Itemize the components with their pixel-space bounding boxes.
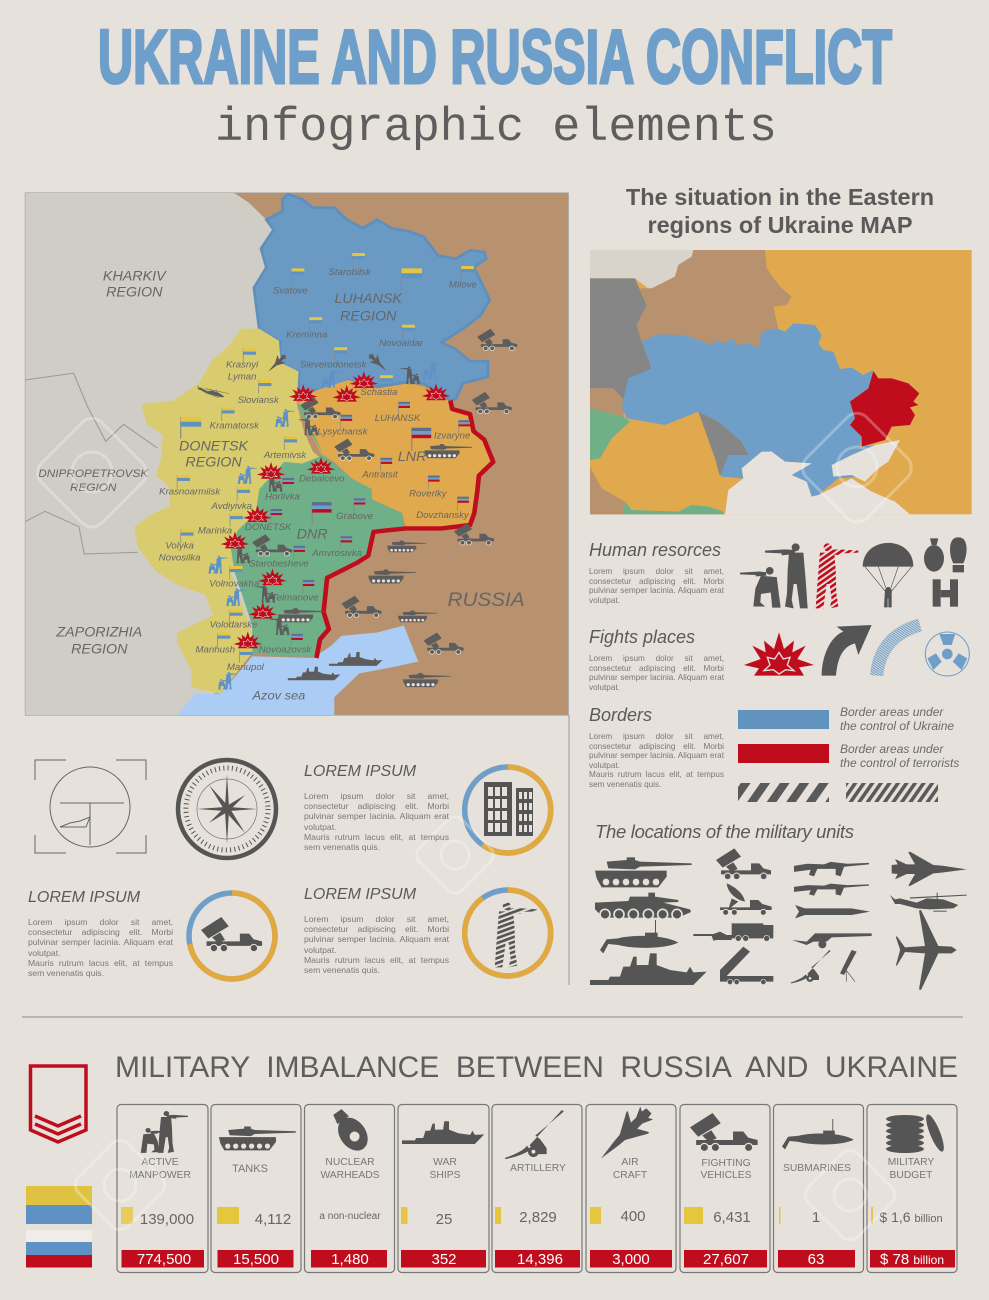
text: borders [589, 732, 724, 789]
card labels: MANPOWER [129, 1170, 191, 1181]
card labels [129, 1157, 934, 1181]
card labels: SHIPS [430, 1170, 461, 1181]
Russia values: 3,000 [612, 1251, 650, 1268]
text: fights places: pulvinar semper lacinia. Aliquam erat [589, 673, 724, 682]
text: lorem block top: sem venenatis quis. [304, 842, 380, 852]
card labels: AIR [621, 1157, 639, 1168]
Russia values [122, 1250, 955, 1268]
section headings right column: Borders [589, 705, 652, 725]
map labels: Roverlky [409, 488, 448, 498]
main map [25, 193, 568, 715]
ring chart: soldier [465, 890, 551, 976]
LNR area [297, 380, 491, 530]
map labels: REGION [340, 308, 397, 323]
map labels: Marinka [198, 525, 232, 535]
Russia values: 27,607 [703, 1251, 749, 1268]
text: borders: Mauris rutrum lacus elit, at tempus [589, 770, 724, 779]
occupied east in red [850, 371, 919, 447]
text: lorem block top: consectetur adipiscing elit. Morbi [304, 801, 449, 811]
subtitle: infographic elements [215, 102, 777, 155]
map labels: REGION [70, 482, 117, 494]
Ukraine value bars [121, 1207, 873, 1224]
text: lorem block left: Lorem ipsum dolor sit amet, [28, 917, 173, 927]
map labels: Volyka [165, 540, 194, 550]
scope diagram [35, 760, 146, 853]
Ukraine shape [622, 323, 875, 497]
Ukraine values [140, 1208, 943, 1228]
text: lorem block right: consectetur adipiscing elit. Morbi [304, 924, 449, 934]
card labels: ARTILLERY [510, 1163, 566, 1174]
Russia values: 63 [808, 1251, 824, 1268]
map labels: Volnovakha [209, 578, 259, 588]
Ukrainian troops [208, 361, 442, 690]
Ukraine values: 4,112 [255, 1211, 291, 1228]
lorem headings [28, 763, 417, 906]
map labels: Milove [449, 279, 477, 289]
Russia values: 774,500 [137, 1251, 191, 1268]
right column heading [626, 184, 934, 238]
text: fights places: volutpat. [589, 683, 620, 692]
Russia values: 14,396 [517, 1251, 563, 1268]
text: lorem block right: sem venenatis quis. [304, 965, 380, 975]
map labels: LUHANSK [334, 291, 403, 306]
Ukraine values: a non-nuclear [319, 1211, 381, 1222]
borders legend: Border areas under [840, 742, 944, 756]
map labels: KHARKIV [103, 268, 167, 283]
map labels: DONETSK [245, 521, 292, 532]
Luhansk region [254, 194, 490, 400]
card labels: WAR [433, 1157, 457, 1168]
map labels: Svatove [273, 285, 308, 295]
card icons [141, 1100, 947, 1170]
text: lorem block top: Mauris rutrum lacus elit, at tempus [304, 832, 449, 842]
text: lorem block left: consectetur adipiscing elit. Morbi [28, 927, 173, 937]
Ukraine values: 6,431 [713, 1209, 751, 1226]
Russia values: 15,500 [233, 1251, 279, 1268]
map labels: ZAPORIZHIA [55, 624, 142, 639]
map labels: Azov sea [251, 689, 305, 702]
Ukraine values: 25 [436, 1211, 452, 1228]
map labels: Mariupol [227, 661, 265, 672]
card labels: ACTIVE [141, 1157, 179, 1168]
map labels: Sloviansk [238, 394, 280, 405]
text: lorem block right: pulvinar semper lacinia. Aliquam erat [304, 934, 449, 944]
map labels: DNIPROPETROVSK [38, 468, 150, 480]
Ukraine flag [26, 1186, 92, 1224]
map labels: Krasnyi [226, 359, 259, 369]
map labels: Novoaidar [379, 337, 424, 348]
text: lorem block right: Lorem ipsum dolor sit amet, [304, 914, 449, 924]
neighbouring regions grey area [25, 193, 274, 715]
borders legend: the control of terrorists [840, 756, 959, 770]
map labels [38, 266, 525, 702]
text: lorem block right: volutpat. [304, 945, 336, 955]
map labels: Kramatorsk [210, 420, 260, 430]
Ukraine values: 400 [620, 1208, 646, 1225]
text: borders: consectetur adipiscing elit. Morbi [589, 742, 724, 751]
map labels: Dovzhansky [416, 509, 470, 520]
text: lorem block left: sem venenatis quis. [28, 968, 104, 978]
map labels: Novoazovsk [259, 643, 313, 654]
map labels: Kreminna [286, 329, 327, 339]
Ukraine values: 1 [812, 1209, 820, 1226]
text: human resources: pulvinar semper lacinia. Aliquam erat [589, 586, 724, 595]
Ukraine values: 139,000 [140, 1211, 194, 1228]
text: lorem block right: Mauris rutrum lacus elit, at tempus [304, 955, 449, 965]
text: human resources: Lorem ipsum dolor sit amet, [589, 567, 724, 576]
military unit icons [590, 848, 967, 990]
text: borders: sem venenatis quis. [589, 780, 661, 789]
borders legend [738, 705, 959, 802]
human resources icons [740, 537, 967, 608]
map labels: Amvrosivka [311, 547, 362, 558]
map labels: LNR [398, 448, 426, 464]
text: lorem block left [28, 917, 173, 978]
lorem headings: LOREM IPSUM [304, 763, 417, 780]
map labels: RUSSIA [448, 589, 525, 611]
Donetsk region [134, 329, 327, 694]
Azov sea [177, 626, 418, 715]
card labels: FIGHTING [701, 1158, 751, 1169]
text: lorem block left: Mauris rutrum lacus elit, at tempus [28, 958, 173, 968]
card labels: SUBMARINES [783, 1163, 851, 1174]
compass [178, 760, 276, 858]
map vehicles and aircraft [195, 329, 517, 687]
lorem headings: LOREM IPSUM [304, 886, 417, 903]
vertical divider [568, 715, 570, 985]
Russia values: 352 [431, 1251, 457, 1268]
map labels: Krasnoarmiisk [159, 486, 221, 497]
map labels: Grabove [336, 510, 373, 521]
ring chart: buildings [465, 767, 551, 853]
Ukraine values: $ 1,6 billion [879, 1209, 943, 1225]
text: lorem block top: volutpat. [304, 822, 336, 832]
map labels: Lysychansk [317, 426, 369, 437]
map labels: Horlivka [265, 491, 300, 502]
section headings right column: Fights places [589, 627, 695, 647]
right column heading: The situation in the Eastern [626, 184, 934, 210]
text: borders: pulvinar semper lacinia. Aliquam erat [589, 751, 724, 760]
map labels: DONETSK [179, 438, 249, 453]
map labels: Schastia [360, 386, 397, 397]
card labels: BUDGET [890, 1170, 933, 1181]
map labels: Manhush [196, 643, 235, 654]
borders legend: Border areas under [840, 705, 944, 719]
map labels: Telmanove [272, 592, 318, 602]
text: lorem block top: pulvinar semper lacinia. Aliquam erat [304, 811, 449, 821]
section headings right column: Human resorces [589, 540, 721, 560]
card labels: CRAFT [613, 1170, 648, 1181]
map labels: Starobesheve [249, 557, 309, 568]
right column heading: regions of Ukraine MAP [647, 212, 913, 238]
map labels: Lyman [228, 371, 257, 381]
text: lorem block right [304, 914, 449, 975]
text: fights places: Lorem ipsum dolor sit amet, [589, 654, 724, 663]
text: lorem block top: Lorem ipsum dolor sit amet, [304, 791, 449, 801]
card labels: MILITARY [888, 1157, 934, 1168]
ring chart: launcher [189, 893, 275, 979]
map labels: REGION [106, 284, 163, 300]
map explosions [221, 371, 450, 648]
borders legend: the control of Ukraine [840, 719, 954, 733]
section headings right column: The locations of the military units [595, 821, 854, 842]
text: human resources [589, 567, 724, 605]
map flags [177, 253, 474, 662]
comparison cards [117, 1104, 957, 1272]
card labels: WARHEADS [320, 1170, 380, 1181]
text: borders: Lorem ipsum dolor sit amet, [589, 732, 724, 741]
map labels: Avdiyivka [211, 500, 252, 511]
small map of Ukraine [590, 250, 972, 514]
DNR area [231, 404, 404, 656]
text: fights places [589, 654, 724, 692]
map labels: Sieverodonetsk [300, 359, 368, 370]
map labels: Debalcevo [299, 473, 345, 484]
map labels: REGION [185, 454, 243, 470]
text: human resources: volutpat. [589, 596, 620, 605]
map labels: REGION [71, 641, 128, 657]
text: borders: volutpat. [589, 761, 620, 770]
section headings right column [589, 540, 854, 842]
map labels: Volodarske [210, 619, 257, 629]
map labels: DNR [297, 526, 328, 542]
text: lorem block top [304, 791, 449, 852]
map labels: Starobilsk [328, 266, 372, 277]
map labels: Novosilka [159, 552, 201, 562]
card labels: NUCLEAR [325, 1157, 375, 1168]
map labels: Izvaryne [434, 430, 470, 441]
rank badge [30, 1066, 86, 1142]
text: lorem block left: volutpat. [28, 948, 60, 958]
text: fights places: consectetur adipiscing elit. Morbi [589, 664, 724, 673]
card labels: VEHICLES [701, 1170, 752, 1181]
separator [22, 1016, 963, 1018]
map labels: Antratsit [361, 469, 398, 480]
text: lorem block left: pulvinar semper lacinia. Aliquam erat [28, 937, 173, 947]
Ukraine values: 2,829 [519, 1209, 557, 1226]
card labels: TANKS [232, 1163, 268, 1175]
red border line [316, 400, 493, 658]
lorem headings: LOREM IPSUM [28, 889, 141, 906]
imbalance heading: MILITARY IMBALANCE BETWEEN RUSSIA AND UKRAINE [115, 1051, 958, 1084]
map labels: LUHANSK [375, 412, 421, 423]
Russia flag [26, 1230, 92, 1268]
text: human resources: consectetur adipiscing elit. Morbi [589, 577, 724, 586]
Russia values: 1,480 [331, 1251, 369, 1268]
Russia values: $ 78 billion [880, 1251, 944, 1268]
map labels: Artemivsk [263, 449, 307, 460]
fights places icons [744, 625, 969, 676]
